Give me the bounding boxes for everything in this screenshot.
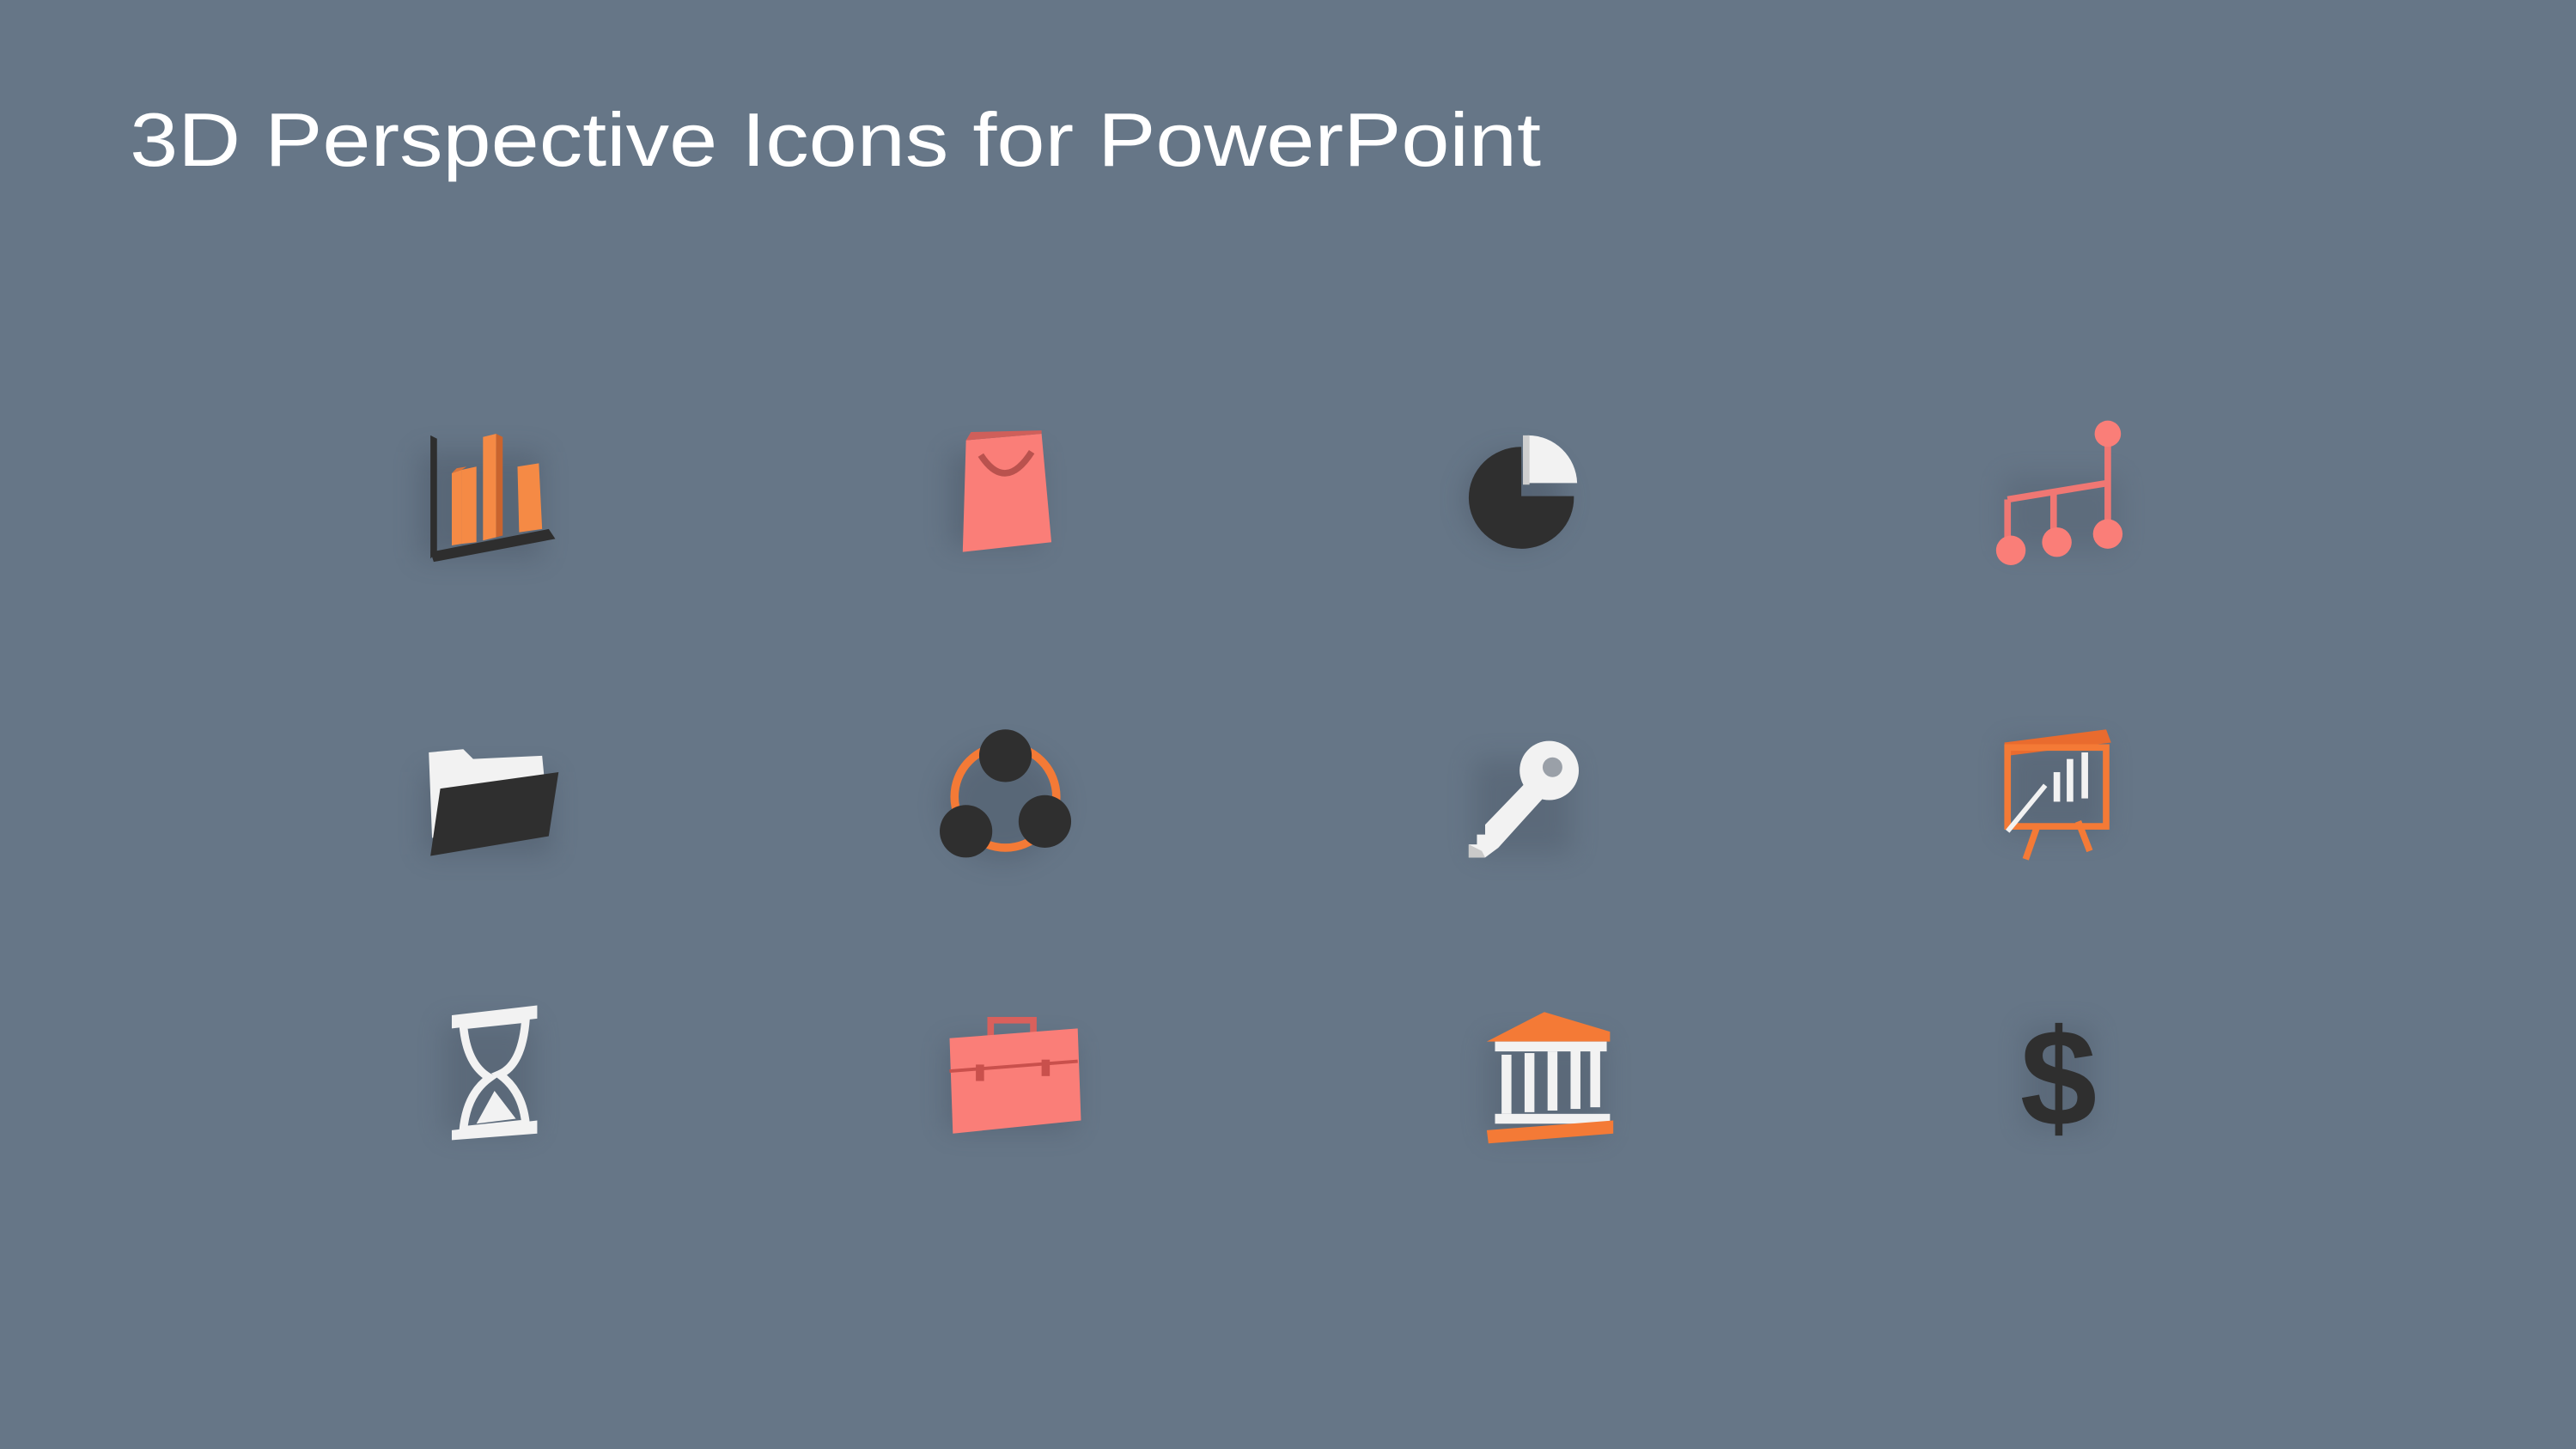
icon: bar chart bbox=[419, 434, 555, 562]
icon: presentation easel bbox=[2004, 729, 2111, 859]
icon: key bbox=[1469, 741, 1579, 857]
icon: folder bbox=[423, 749, 558, 856]
icon: bank bbox=[1487, 1012, 1613, 1143]
icon: briefcase bbox=[947, 1020, 1081, 1134]
icon: hourglass bbox=[443, 1006, 537, 1140]
icon: cycle bbox=[940, 729, 1071, 861]
icon: pie chart bbox=[1465, 435, 1577, 549]
title: 3D Perspective Icons for PowerPoint bbox=[130, 97, 1541, 182]
icon: hierarchy bbox=[1996, 421, 2122, 565]
icon: dollar: $ bbox=[2020, 1002, 2097, 1155]
icon: shopping bag bbox=[949, 430, 1051, 552]
